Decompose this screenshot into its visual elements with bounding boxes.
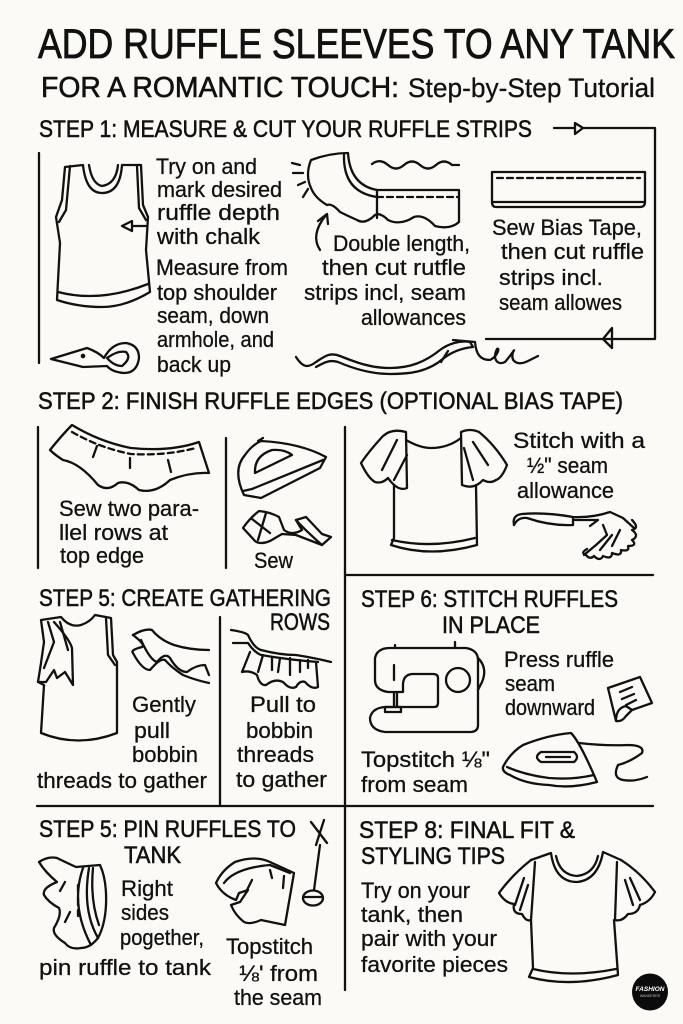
text: topstitch from the seam: ⅛' from xyxy=(239,961,318,986)
icon: gathered ruffle xyxy=(231,630,331,688)
icon: scissors xyxy=(51,343,139,373)
text: topstitch from seam xyxy=(361,747,490,797)
heading: step 1: STEP 1: MEASURE & CUT YOUR RUFFLE STRIPS xyxy=(39,116,532,143)
logo badge: FASHION xyxy=(636,986,665,993)
heading: create gathering rows: STEP 5: CREATE GATHERING xyxy=(39,585,331,612)
text: sew bias tape: strips incl. xyxy=(499,265,603,290)
text: gently pull: threads to gather xyxy=(37,768,207,793)
text: topstitch from the seam xyxy=(226,934,322,1010)
heading: pin ruffles to tank: TANK xyxy=(124,842,181,869)
heading: pin ruffles to tank xyxy=(39,816,296,869)
title xyxy=(38,20,675,104)
icon: wavy ruffle xyxy=(132,630,209,683)
icon: bias tape strip xyxy=(492,172,645,207)
icon: ruffle strip xyxy=(292,153,459,250)
text: measure: seam, down xyxy=(157,303,269,328)
heading: stitch ruffles in place: IN PLACE xyxy=(442,612,540,639)
title: Step-by-Step Tutorial xyxy=(408,73,655,103)
text: double length: Double length, xyxy=(333,231,470,256)
text: try on your tank xyxy=(361,878,508,977)
icon: iron xyxy=(238,438,326,498)
text: double length: then cut rutfle xyxy=(322,255,466,280)
text: pull to bobbin: Pull to xyxy=(250,692,316,717)
text: pull to bobbin: bobbin xyxy=(246,718,313,743)
panel: step 1 xyxy=(39,116,655,377)
text: double length: allowances xyxy=(361,305,466,330)
text: stitch seam allowance xyxy=(513,428,646,503)
text: pull to bobbin: threads xyxy=(237,742,314,767)
text: sew bias tape: Sew Bias Tape, xyxy=(492,215,642,240)
icon: needle and thread xyxy=(296,340,538,374)
text: measure: top shoulder xyxy=(157,280,277,305)
icon: folded ruffle xyxy=(39,858,106,948)
text: sew two rows: top edge xyxy=(60,543,144,568)
text: right sides together: sides xyxy=(121,900,169,925)
text: try on your tank: tank, then xyxy=(361,902,463,927)
text: gently pull: bobbin xyxy=(132,742,198,767)
text: press ruffle seam: seam xyxy=(505,671,555,696)
panel: step 5 pin ruffles xyxy=(39,816,327,1010)
icon: tank with ruffle xyxy=(38,615,117,740)
icon: sewing machine xyxy=(370,642,484,732)
icon: pressed fabric xyxy=(608,677,652,721)
panel: step 8 xyxy=(359,817,668,1010)
text: pull to bobbin: to gather xyxy=(236,767,328,792)
icon: pin xyxy=(303,820,327,906)
text: double length: strips incl, seam xyxy=(304,280,466,305)
text: right sides together: Right xyxy=(121,876,174,901)
text: try on your tank: pair with your xyxy=(361,926,498,951)
heading: final fit and styling tips xyxy=(359,817,575,870)
heading: final fit and styling tips: STEP 8: FINAL FIT & xyxy=(359,817,575,844)
text: press ruffle seam: downward xyxy=(505,695,595,720)
icon: bias tape ribbon xyxy=(243,511,331,545)
text: press ruffle seam: Press ruffle xyxy=(504,647,614,672)
text: mark ruffle depth: with chalk xyxy=(156,224,261,249)
text: mark ruffle depth: Try on and xyxy=(156,154,257,179)
text: stitch seam allowance: Stitch with a xyxy=(513,428,646,453)
text: gently pull: pull xyxy=(134,718,170,743)
divider lines xyxy=(37,427,653,990)
text: right sides together xyxy=(39,876,212,980)
heading: pin ruffles to tank: STEP 5: PIN RUFFLES TO xyxy=(39,816,296,843)
text: sew two rows: llel rows at xyxy=(59,520,169,545)
text: measure: Measure from xyxy=(156,255,288,280)
text: sew bias tape: then cut ruffle xyxy=(501,239,644,264)
text: stitch seam allowance: ½" seam xyxy=(527,453,608,478)
text: sew bias tape xyxy=(492,215,644,315)
text: mark ruffle depth: mark desired xyxy=(157,177,282,202)
text: topstitch from the seam: Topstitch xyxy=(226,934,313,959)
text: mark ruffle depth xyxy=(156,154,282,249)
icon: gathered ruffle seam xyxy=(514,512,636,559)
text: right sides together: pogether, xyxy=(120,925,204,950)
heading: create gathering rows xyxy=(39,585,331,636)
icon: ruffle with stitch rows xyxy=(50,425,209,491)
heading: stitch ruffles in place xyxy=(361,586,618,639)
logo badge: WANDERER xyxy=(640,994,661,998)
text: topstitch from the seam: the seam xyxy=(234,985,322,1010)
arrow: step 1 flow connector xyxy=(486,123,655,348)
icon: finished top xyxy=(499,852,655,982)
text: measure xyxy=(156,255,288,377)
panel: step 6 xyxy=(361,586,652,797)
icon: top with ruffle sleeves xyxy=(361,430,507,552)
text: sew bias tape: seam allowes xyxy=(499,290,622,315)
text: topstitch from seam: Topstitch ⅛" xyxy=(361,747,490,772)
text: sew two rows: Sew two para- xyxy=(59,496,199,521)
text: sew: Sew xyxy=(254,548,294,573)
logo badge xyxy=(632,974,668,1010)
title: FOR A ROMANTIC TOUCH: xyxy=(41,72,399,104)
text: mark ruffle depth: ruffle depth xyxy=(157,200,280,225)
heading: step 2: STEP 2: FINISH RUFFLE EDGES (OPTIONAL BIAS TAPE) xyxy=(38,388,623,415)
text: try on your tank: favorite pieces xyxy=(361,952,508,977)
text: gently pull xyxy=(37,692,207,793)
heading: create gathering rows: ROWS xyxy=(270,609,330,636)
text: double length xyxy=(304,231,470,330)
heading: stitch ruffles in place: STEP 6: STITCH RUFFLES xyxy=(361,586,618,613)
text: measure: back up xyxy=(157,352,231,377)
icon: iron with cord xyxy=(503,733,647,786)
panel: step 5 gathering rows xyxy=(37,585,331,793)
text: topstitch from seam: from seam xyxy=(361,772,468,797)
text: measure: armhole, and xyxy=(157,327,274,352)
text: try on your tank: Try on your xyxy=(361,878,470,903)
text: press ruffle seam xyxy=(504,647,614,720)
text: gently pull: Gently xyxy=(132,692,197,717)
text: right sides together: pin ruffle to tank xyxy=(39,955,212,980)
icon: tank top with chalk arrow xyxy=(56,165,150,307)
text: stitch seam allowance: allowance xyxy=(517,478,614,503)
text: pull to bobbin xyxy=(236,692,328,792)
text: sew two rows xyxy=(59,496,199,568)
panel: step 2 xyxy=(38,388,646,573)
icon: sleeve piece xyxy=(216,858,294,925)
heading: final fit and styling tips: STYLING TIPS xyxy=(361,843,505,870)
